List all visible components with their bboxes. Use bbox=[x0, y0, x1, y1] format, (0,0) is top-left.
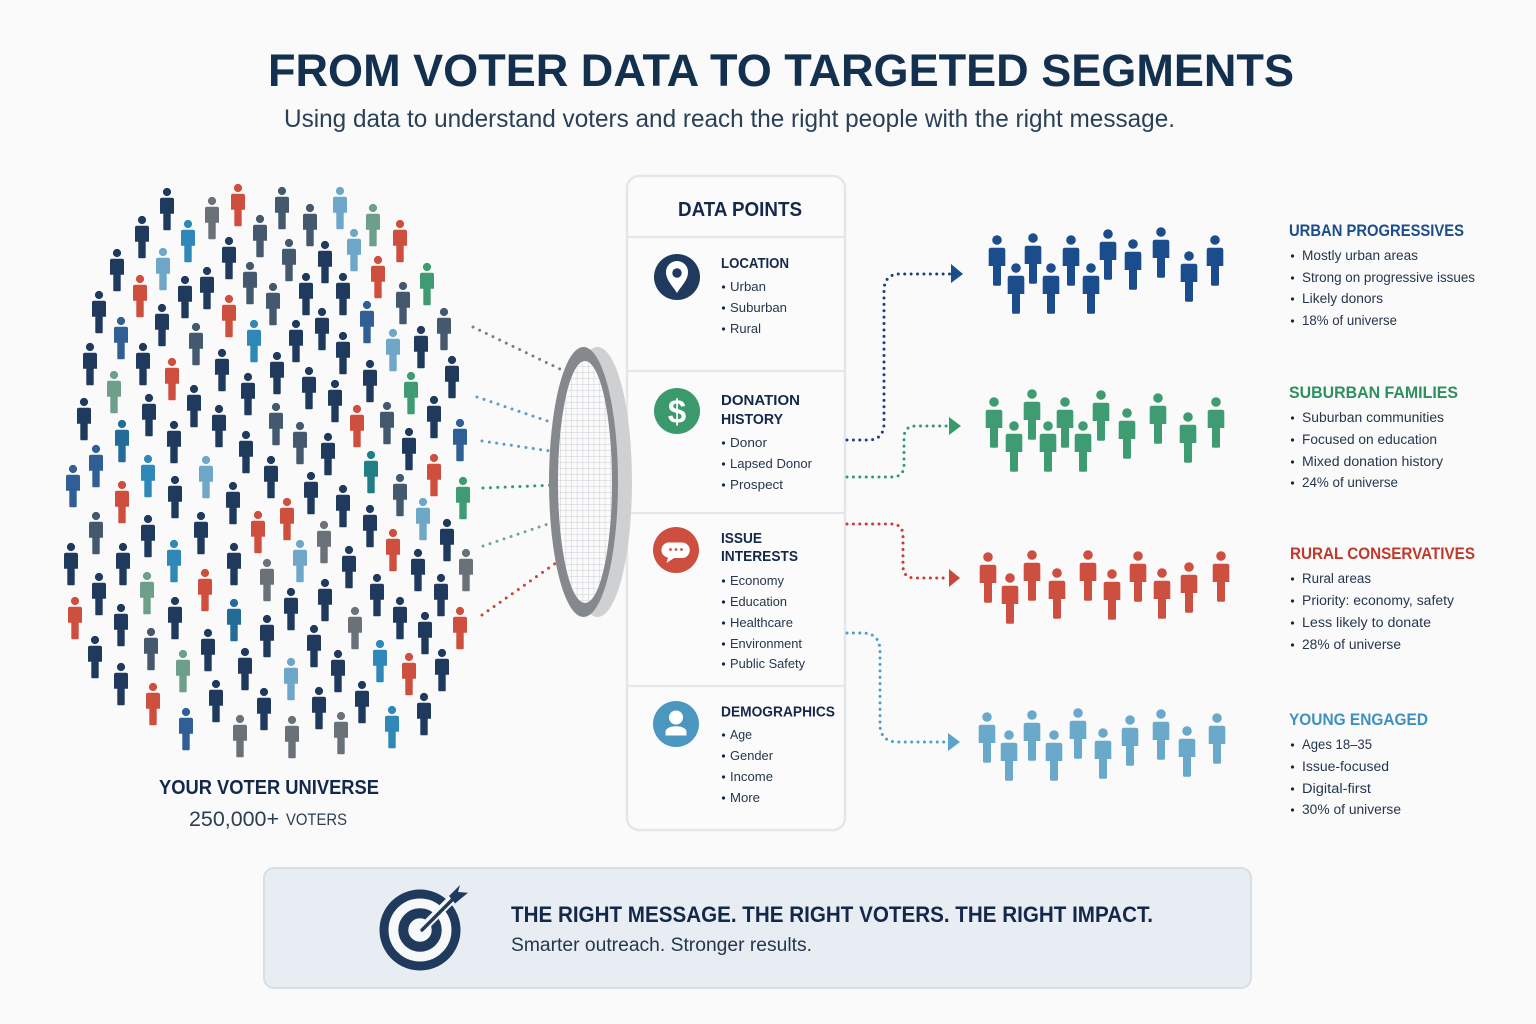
section: location: Suburban bbox=[730, 300, 787, 315]
panel: data points bbox=[627, 176, 845, 830]
section: issue interests: Healthcare bbox=[730, 615, 793, 630]
section: location: Urban bbox=[730, 279, 766, 294]
section: demographics bbox=[653, 701, 835, 805]
segment text: suburban families: 24% of universe bbox=[1302, 475, 1398, 490]
segment people: rural conservatives bbox=[980, 550, 1229, 624]
section: demographics: DEMOGRAPHICS bbox=[721, 704, 835, 720]
banner headline: THE RIGHT MESSAGE. THE RIGHT VOTERS. THE RIGHT IMPACT. bbox=[511, 902, 1153, 927]
segment text: urban progressives: Likely donors bbox=[1302, 291, 1383, 306]
section: donation history: Lapsed Donor bbox=[730, 456, 813, 471]
segment text: rural conservatives bbox=[1290, 545, 1475, 652]
section: donation history: Prospect bbox=[730, 477, 783, 492]
segment text: suburban families: Suburban communities bbox=[1302, 410, 1444, 425]
section: issue interests: Education bbox=[730, 594, 787, 609]
dotted lines into filter bbox=[473, 327, 566, 615]
label: your voter universe: YOUR VOTER UNIVERSE bbox=[159, 777, 379, 799]
segment text: suburban families: Focused on education bbox=[1302, 432, 1437, 447]
bottom banner bbox=[264, 868, 1251, 988]
icon: dollar: $ bbox=[668, 393, 686, 430]
arrow: to urban progressives bbox=[847, 264, 963, 440]
icon: speech bubble bbox=[653, 527, 699, 573]
label: voter count: VOTERS bbox=[286, 810, 347, 829]
section: issue interests: Environment bbox=[730, 636, 802, 651]
subtitle: Using data to understand voters and reach the right people with the right message. bbox=[284, 105, 1175, 133]
section: issue interests: Public Safety bbox=[730, 656, 805, 671]
segment text: urban progressives: 18% of universe bbox=[1302, 313, 1397, 328]
section: donation history: DONATION bbox=[721, 393, 800, 409]
segment text: urban progressives bbox=[1289, 222, 1475, 328]
icon: map pin bbox=[654, 254, 700, 300]
segment text: young engaged bbox=[1289, 711, 1428, 817]
section: issue interests bbox=[653, 527, 805, 671]
section: issue interests: Economy bbox=[730, 573, 784, 588]
segment text: rural conservatives: 28% of universe bbox=[1302, 637, 1401, 652]
label: voter count: 250,000+ bbox=[189, 808, 279, 831]
arrow: to young engaged bbox=[847, 633, 960, 751]
segment people: suburban families bbox=[986, 389, 1224, 472]
segment text: rural conservatives: Priority: economy, safety bbox=[1302, 593, 1454, 608]
label: voter count bbox=[189, 808, 347, 831]
segment text: rural conservatives: RURAL CONSERVATIVES bbox=[1290, 545, 1475, 563]
section: issue interests: ISSUE bbox=[721, 531, 762, 547]
segment text: rural conservatives: Rural areas bbox=[1302, 571, 1371, 586]
segment text: rural conservatives: Less likely to donate bbox=[1302, 615, 1431, 630]
voter crowd bbox=[64, 184, 473, 758]
section: demographics: Age bbox=[730, 727, 752, 742]
segment text: young engaged: YOUNG ENGAGED bbox=[1289, 711, 1428, 729]
filter ring bbox=[549, 347, 632, 617]
segment text: suburban families bbox=[1289, 384, 1458, 490]
section: demographics: Income bbox=[730, 769, 773, 784]
icon: person bbox=[653, 701, 699, 747]
segment people: young engaged bbox=[979, 708, 1225, 781]
section: demographics: Gender bbox=[730, 748, 774, 763]
section: issue interests: INTERESTS bbox=[721, 549, 798, 565]
arrow: to suburban families bbox=[847, 417, 961, 477]
segment text: young engaged: 30% of universe bbox=[1302, 802, 1401, 817]
heading: data points: DATA POINTS bbox=[678, 199, 802, 221]
section: demographics: More bbox=[730, 790, 760, 805]
segment text: young engaged: Issue-focused bbox=[1302, 759, 1389, 774]
section: location: LOCATION bbox=[721, 256, 789, 272]
section: location: Rural bbox=[730, 321, 761, 336]
segment text: urban progressives: URBAN PROGRESSIVES bbox=[1289, 222, 1464, 240]
title: FROM VOTER DATA TO TARGETED SEGMENTS bbox=[268, 45, 1294, 96]
segment text: urban progressives: Mostly urban areas bbox=[1302, 248, 1418, 263]
banner subline: Smarter outreach. Stronger results. bbox=[511, 935, 812, 956]
segment text: suburban families: SUBURBAN FAMILIES bbox=[1289, 384, 1458, 402]
segment text: suburban families: Mixed donation history bbox=[1302, 454, 1443, 469]
icon: dollar bbox=[654, 388, 700, 434]
icon: target with arrow bbox=[384, 885, 468, 966]
section: donation history: HISTORY bbox=[721, 412, 783, 428]
section: donation history bbox=[654, 388, 813, 492]
segment text: young engaged: Ages 18–35 bbox=[1302, 737, 1372, 752]
segment text: young engaged: Digital-first bbox=[1302, 781, 1371, 796]
section: donation history: Donor bbox=[730, 435, 768, 450]
arrow: to rural conservatives bbox=[847, 524, 960, 587]
segment people: urban progressives bbox=[989, 227, 1223, 314]
segment text: urban progressives: Strong on progressive issues bbox=[1302, 270, 1475, 285]
section: location bbox=[654, 254, 789, 336]
